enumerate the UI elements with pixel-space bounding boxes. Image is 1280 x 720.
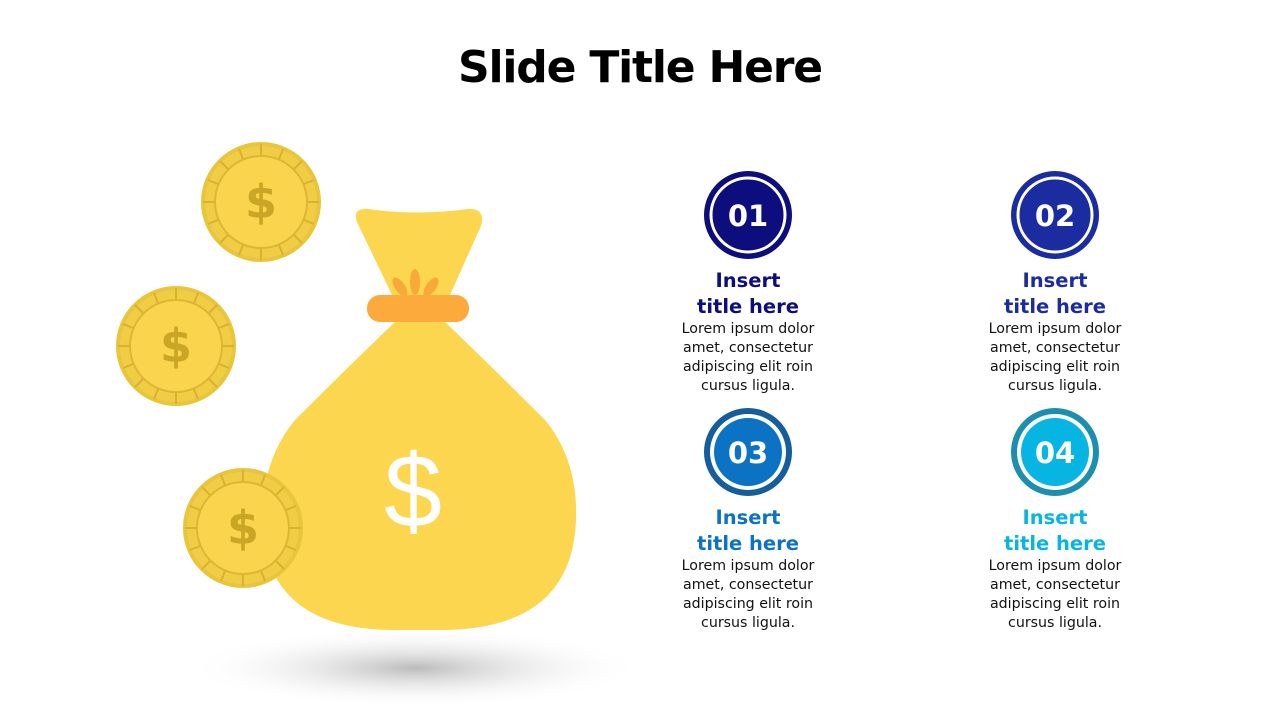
item 01: adipiscing elit roin (683, 359, 813, 375)
item 02: Insert (1023, 269, 1087, 292)
item 04: amet, consectetur (990, 577, 1120, 593)
title: Slide Title Here (458, 42, 822, 93)
item 01: title here (697, 295, 799, 318)
item 02 (989, 171, 1122, 394)
item 02: title here (1004, 295, 1106, 318)
item 02: Lorem ipsum dolor (989, 321, 1121, 337)
item 01: 01 (728, 199, 768, 233)
item 01 (682, 171, 814, 394)
item 03: title here (697, 532, 799, 555)
item 03 (682, 408, 814, 631)
item 01: Insert (716, 269, 780, 292)
item 01: cursus ligula. (701, 378, 795, 394)
illustration: money bag with coins (116, 142, 576, 694)
item 03: Insert (716, 506, 780, 529)
item 04: Lorem ipsum dolor (989, 558, 1121, 574)
item 02: 02 (1035, 199, 1075, 233)
coin 1 (201, 142, 321, 262)
item 04: 04 (1035, 436, 1075, 470)
item 02: cursus ligula. (1008, 378, 1102, 394)
item 01: Lorem ipsum dolor (682, 321, 814, 337)
item 03: adipiscing elit roin (683, 596, 813, 612)
item 04 (989, 408, 1122, 631)
coin 2 (116, 286, 236, 406)
coin 3 (183, 468, 303, 588)
item 02: adipiscing elit roin (990, 359, 1120, 375)
item 01: amet, consectetur (683, 340, 813, 356)
item 03: Lorem ipsum dolor (682, 558, 814, 574)
item 03: 03 (728, 436, 768, 470)
item 04: Insert (1023, 506, 1087, 529)
item 02: amet, consectetur (990, 340, 1120, 356)
item 03: cursus ligula. (701, 615, 795, 631)
money bag: $ (384, 434, 442, 550)
item 04: adipiscing elit roin (990, 596, 1120, 612)
money bag (262, 209, 576, 630)
item 03: amet, consectetur (683, 577, 813, 593)
item 04: cursus ligula. (1008, 615, 1102, 631)
item 04: title here (1004, 532, 1106, 555)
shadow (185, 628, 645, 708)
